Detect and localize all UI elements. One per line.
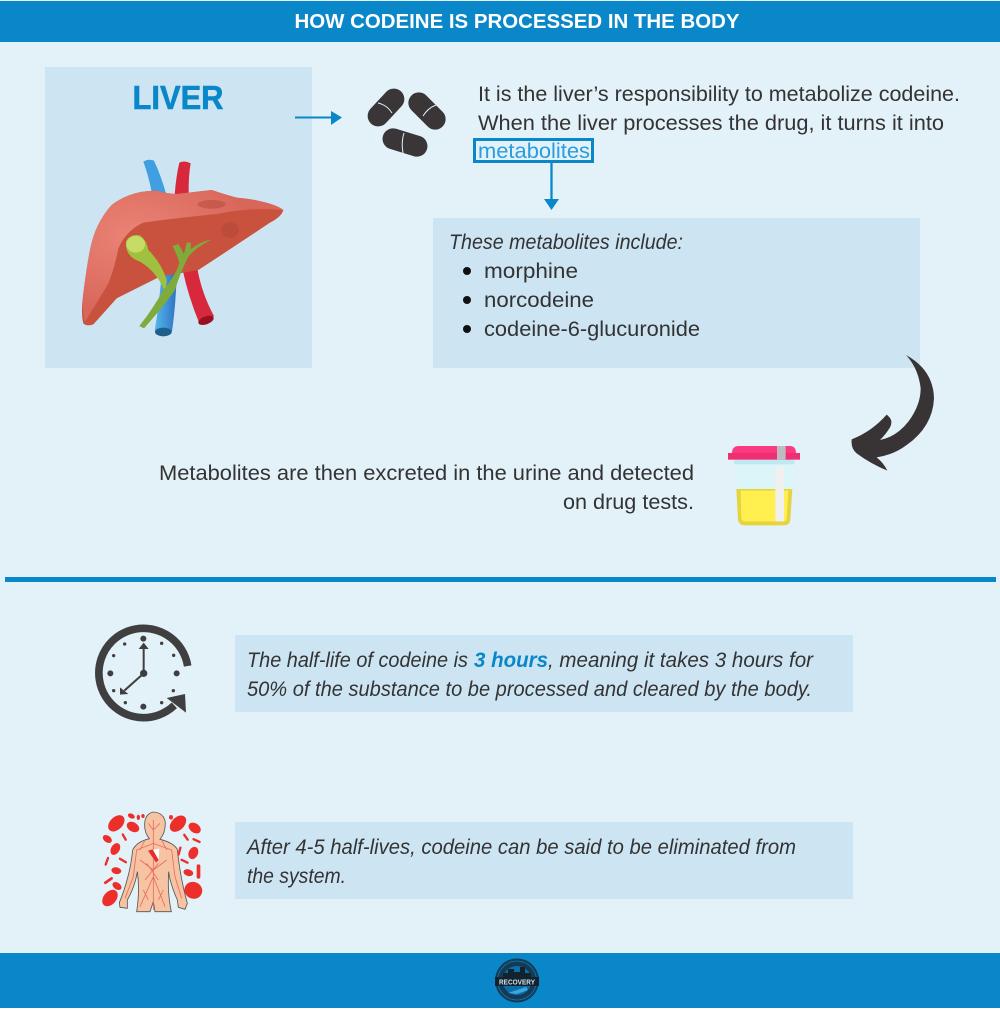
panel: liver <box>45 67 312 368</box>
arrow: curved to urine cup <box>852 355 934 471</box>
panel: elimination <box>235 822 853 899</box>
panel: half-life <box>235 635 853 712</box>
icon: liver illustration <box>82 160 283 336</box>
text: excretion: on drug tests. <box>563 491 694 514</box>
text: half-life: The half-life of codeine is <box>247 649 468 672</box>
text: liver metabolizes codeine: When the liver processes the drug, it turns it into <box>478 112 944 135</box>
text: excretion: Metabolites are then excreted in the urine and detected <box>159 462 694 485</box>
text: half-life: , meaning it takes 3 hours for <box>548 649 814 672</box>
text: half-life <box>247 649 814 701</box>
text: excretion <box>159 462 694 514</box>
text: half-life: 3 hours <box>474 649 548 672</box>
arrow: liver to pills <box>295 111 342 125</box>
body silhouette <box>119 812 187 912</box>
list: metabolites: codeine-6-glucuronide <box>484 318 700 341</box>
footer banner <box>0 953 1000 1008</box>
icon: body with blood cells <box>99 812 205 912</box>
icon: pills <box>363 84 450 159</box>
panel: metabolites list <box>433 218 920 368</box>
list: metabolites: morphine <box>484 260 578 283</box>
list: metabolites <box>463 260 700 341</box>
text: liver metabolizes codeine: It is the liver’s responsibility to metabolize codeine. <box>478 83 960 106</box>
text: elimination: the system. <box>247 865 346 888</box>
icon: recovery logo: RECOVERY <box>499 980 535 986</box>
text: half-life: 50% of the substance to be processed and cleared by the body. <box>247 678 812 701</box>
callout: metabolites: metabolites <box>478 140 590 163</box>
text: elimination <box>245 836 796 888</box>
text: metabolites include: These metabolites include: <box>449 231 683 254</box>
text: liver metabolizes codeine <box>478 83 960 135</box>
header banner <box>0 1 1000 42</box>
icon: urine cup <box>728 446 800 525</box>
text: elimination: After 4-5 half-lives, codeine can be said to be eliminated from <box>245 836 796 859</box>
title: HOW CODEINE IS PROCESSED IN THE BODY <box>294 11 740 33</box>
divider <box>5 577 996 582</box>
icon: recovery logo <box>495 958 539 1002</box>
arrow: metabolites down <box>544 163 559 210</box>
heading: liver: LIVER <box>132 79 224 116</box>
list: metabolites: norcodeine <box>484 289 594 312</box>
icon: clock <box>99 628 188 718</box>
